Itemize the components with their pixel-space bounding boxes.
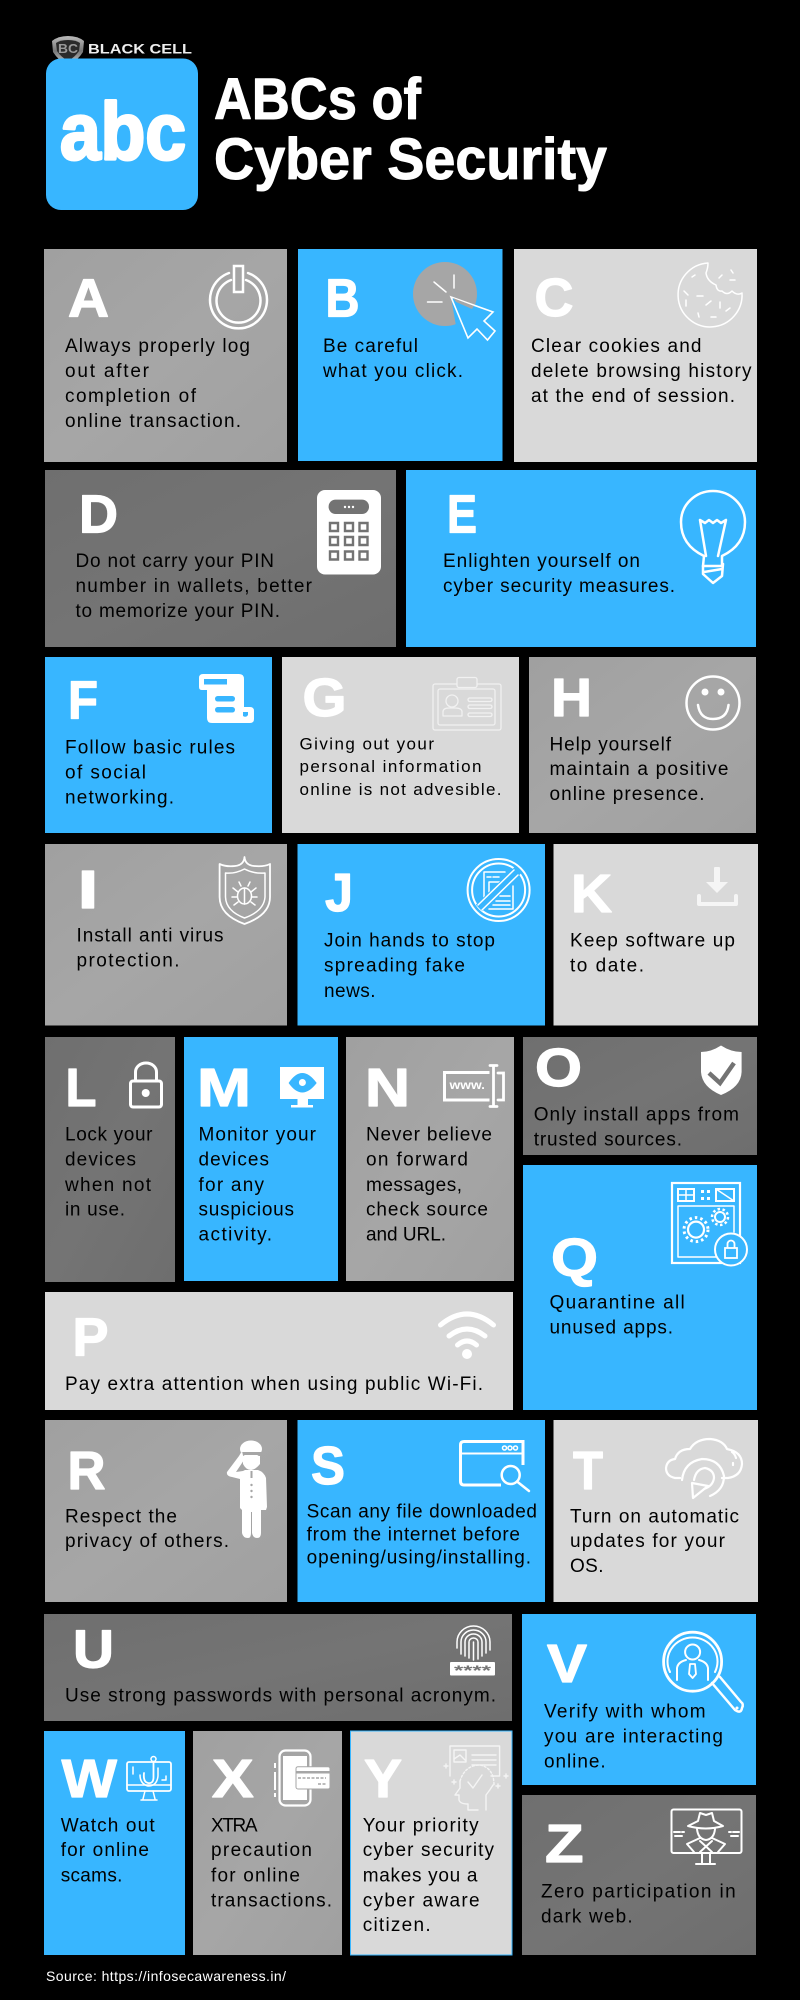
text: I: Install anti virus xyxy=(76,926,224,946)
letter T: T xyxy=(573,1441,603,1501)
icon: saluting officer xyxy=(227,1440,267,1538)
text: E: Enlighten yourself on xyxy=(443,551,640,572)
letter P: P xyxy=(72,1308,108,1368)
text: N: on forward xyxy=(366,1150,468,1170)
panel: D xyxy=(45,470,396,647)
letter L: L xyxy=(66,1058,96,1118)
panel: B xyxy=(298,249,502,461)
text: M: devices xyxy=(198,1150,269,1170)
panel: E xyxy=(406,470,756,647)
panel: X xyxy=(193,1731,342,1955)
icon: padlock xyxy=(130,1063,162,1107)
text: C: at the end of session. xyxy=(531,386,735,407)
text: Q: Quarantine all xyxy=(550,1293,685,1314)
text: E xyxy=(443,551,675,597)
text: F: Follow basic rules xyxy=(65,738,235,758)
text: L: when not xyxy=(64,1175,152,1196)
text: N xyxy=(366,1124,492,1246)
panel: I xyxy=(45,844,287,1026)
text: G: personal information xyxy=(300,757,482,776)
text: N: and URL. xyxy=(366,1224,446,1246)
text: K: to date. xyxy=(570,956,644,976)
text: Q: unused apps. xyxy=(550,1318,673,1339)
text: A: completion of xyxy=(65,386,197,407)
text: L xyxy=(64,1124,153,1221)
icon: fingerprint password xyxy=(450,1626,495,1678)
panel: P xyxy=(45,1292,513,1410)
text: A: online transaction. xyxy=(65,411,241,432)
text: L: devices xyxy=(65,1150,136,1170)
letter A: A xyxy=(68,268,109,328)
icon: www address bar: www. xyxy=(448,1078,485,1092)
text: X: for online xyxy=(211,1865,300,1886)
icon: cookie xyxy=(678,263,742,327)
panel: U xyxy=(44,1614,512,1721)
text: C: delete browsing history xyxy=(531,361,752,382)
letter X: X xyxy=(212,1749,254,1809)
icon: scroll xyxy=(199,674,254,723)
text: W: for online xyxy=(61,1840,149,1861)
text: B: Be careful xyxy=(323,336,418,357)
text: M: Monitor your xyxy=(198,1124,317,1146)
text: G xyxy=(300,734,502,799)
panel: H xyxy=(529,657,756,833)
text: V: Verify with whom xyxy=(544,1702,706,1723)
icon: cursor click xyxy=(413,262,495,340)
letter F: F xyxy=(68,671,98,731)
text: Y: cyber security xyxy=(363,1840,494,1861)
text: G: online is not advesible. xyxy=(300,780,502,799)
text: S: from the internet before xyxy=(307,1524,520,1546)
letter V: V xyxy=(547,1634,587,1694)
text: C: Clear cookies and xyxy=(531,336,702,357)
icon: fingerprint password: **** xyxy=(454,1662,492,1678)
text: L: in use. xyxy=(65,1200,125,1221)
letter W: W xyxy=(62,1749,117,1809)
text: Y: Your priority xyxy=(363,1815,479,1836)
icon: monitor eye xyxy=(280,1067,324,1108)
text: Z: Zero participation in xyxy=(541,1882,736,1902)
panel: F xyxy=(45,657,272,833)
text: F: of social xyxy=(65,762,146,784)
panel: A xyxy=(44,249,287,462)
icon: keypad xyxy=(317,490,381,574)
text: H: online presence. xyxy=(550,784,704,805)
text: O: Only install apps from xyxy=(534,1105,739,1126)
text: S: Scan any file downloaded xyxy=(307,1502,537,1522)
text: D: number in wallets, better xyxy=(76,576,313,597)
text: F xyxy=(65,738,235,808)
panel: T xyxy=(554,1420,758,1602)
letter R: R xyxy=(68,1441,106,1501)
text: Q xyxy=(550,1293,685,1339)
text: B: what you click. xyxy=(322,361,463,382)
text: T: Turn on automatic xyxy=(570,1506,739,1528)
text: S: opening/using/installing. xyxy=(307,1547,531,1568)
letter J: J xyxy=(325,863,353,923)
text: X xyxy=(211,1815,332,1911)
text: H: Help yourself xyxy=(550,734,672,756)
text: T: OS. xyxy=(570,1556,604,1577)
panel: Z xyxy=(522,1795,756,1955)
letter O: O xyxy=(535,1038,582,1098)
icon: bug shield xyxy=(220,857,270,924)
text: D: Do not carry your PIN xyxy=(76,551,274,572)
panel: Q xyxy=(523,1165,757,1410)
icon: ID card xyxy=(433,678,501,730)
letter G: G xyxy=(302,668,346,728)
text: T: updates for your xyxy=(570,1531,726,1552)
text: J: news. xyxy=(324,981,376,1002)
logo: Black Cell: BLACK CELL xyxy=(88,40,193,56)
letter Z: Z xyxy=(545,1814,584,1874)
text: D xyxy=(76,551,313,622)
text: F: networking. xyxy=(65,788,174,808)
icon: no fake news xyxy=(468,859,530,921)
icon: magnifier person xyxy=(664,1632,743,1712)
text: M: activity. xyxy=(198,1224,272,1246)
text: Y xyxy=(363,1815,494,1936)
icon: smiley xyxy=(686,676,740,730)
text: R: privacy of others. xyxy=(65,1531,229,1552)
text: U: Use strong passwords with personal acronym. xyxy=(65,1686,496,1706)
panel: R xyxy=(45,1420,287,1602)
logo: Black Cell xyxy=(52,36,193,66)
title: ABCs of xyxy=(214,67,422,132)
letter K: K xyxy=(571,864,612,924)
panel: N xyxy=(346,1037,514,1281)
title: Cyber Security xyxy=(214,127,607,192)
text: P: Pay extra attention when using public Wi-Fi. xyxy=(65,1374,483,1395)
text: I: protection. xyxy=(76,950,180,972)
text: C xyxy=(531,336,752,407)
text: Y: makes you a xyxy=(363,1865,478,1886)
text: S xyxy=(307,1502,537,1568)
letter Q: Q xyxy=(551,1228,598,1288)
letter I: I xyxy=(78,860,98,920)
text: Y: citizen. xyxy=(363,1915,431,1936)
text: Y: cyber aware xyxy=(363,1890,480,1911)
text: A: out after xyxy=(65,361,150,382)
logo: Black Cell: BC xyxy=(58,41,79,56)
text: W: scams. xyxy=(61,1865,122,1886)
text: X: XTRA xyxy=(211,1815,258,1836)
text: E: cyber security measures. xyxy=(443,576,675,597)
text: A: Always properly log xyxy=(65,336,250,357)
text: B xyxy=(322,336,463,382)
text: Z xyxy=(541,1882,736,1927)
panel: V xyxy=(522,1614,756,1785)
text: I xyxy=(76,926,224,972)
text: X: transactions. xyxy=(211,1890,332,1911)
text: K: Keep software up xyxy=(570,930,735,952)
text: N: check source xyxy=(366,1200,488,1221)
text: L: Lock your xyxy=(65,1124,153,1146)
abc badge: abc xyxy=(60,87,186,177)
text: K xyxy=(570,930,735,976)
icon: www address bar xyxy=(444,1066,504,1106)
text: O xyxy=(534,1105,739,1150)
icon: shield check xyxy=(701,1046,742,1095)
text: W xyxy=(61,1815,155,1886)
icon: download xyxy=(699,867,736,904)
text: J: Join hands to stop xyxy=(324,930,495,952)
text: G: Giving out your xyxy=(300,734,434,754)
text: M: suspicious xyxy=(198,1200,294,1221)
source line: Source: https://infosecawareness.in/ xyxy=(46,1968,286,1984)
text: X: precaution xyxy=(211,1840,312,1861)
letter C: C xyxy=(534,268,574,328)
text: A xyxy=(65,336,250,432)
panel: J xyxy=(298,844,545,1026)
panel: C xyxy=(514,249,757,462)
icon: dark web spy xyxy=(672,1810,742,1864)
letter D: D xyxy=(79,484,118,544)
panel: L xyxy=(45,1037,175,1282)
text: H xyxy=(550,734,728,805)
panel: Y xyxy=(350,1731,512,1955)
text: T xyxy=(570,1506,739,1577)
icon: light bulb xyxy=(681,491,745,583)
letter B: B xyxy=(326,268,360,328)
abc badge xyxy=(46,58,198,210)
icon: power button xyxy=(210,266,267,328)
panel: G xyxy=(282,657,519,833)
title xyxy=(214,67,607,192)
text: W: Watch out xyxy=(61,1815,155,1836)
panel: K xyxy=(554,844,758,1026)
text: V: online. xyxy=(544,1751,606,1772)
letter Y: Y xyxy=(364,1749,402,1809)
text: N: Never believe xyxy=(366,1124,492,1146)
panel: O xyxy=(523,1037,757,1155)
text: O: trusted sources. xyxy=(534,1130,682,1150)
panel: M xyxy=(184,1037,338,1281)
letter S: S xyxy=(311,1436,345,1496)
text: R xyxy=(65,1506,229,1552)
icon: head with checklist xyxy=(444,1746,508,1810)
text: V: you are interacting xyxy=(544,1726,723,1748)
text: N: messages, xyxy=(366,1175,462,1196)
letter N: N xyxy=(365,1058,410,1118)
text: J xyxy=(324,930,495,1002)
icon: browser search xyxy=(460,1442,529,1491)
text: M: for any xyxy=(198,1175,264,1196)
text: Z: dark web. xyxy=(541,1906,633,1927)
text: V xyxy=(544,1702,723,1772)
letter M: M xyxy=(197,1058,251,1118)
icon: wifi xyxy=(440,1314,494,1359)
icon: app quarantine xyxy=(672,1183,747,1266)
icon: phishing monitor xyxy=(127,1756,171,1800)
text: D: to memorize your PIN. xyxy=(76,601,280,622)
icon: cloud refresh xyxy=(666,1439,742,1498)
letter U: U xyxy=(73,1620,114,1680)
panel: S xyxy=(298,1420,545,1602)
text: J: spreading fake xyxy=(324,956,465,976)
icon: phone and card xyxy=(275,1750,330,1806)
text: R: Respect the xyxy=(65,1506,177,1528)
text: H: maintain a positive xyxy=(550,759,728,780)
letter E: E xyxy=(447,484,477,544)
panel: W xyxy=(44,1731,185,1955)
text: M xyxy=(198,1124,317,1246)
letter H: H xyxy=(551,668,592,728)
